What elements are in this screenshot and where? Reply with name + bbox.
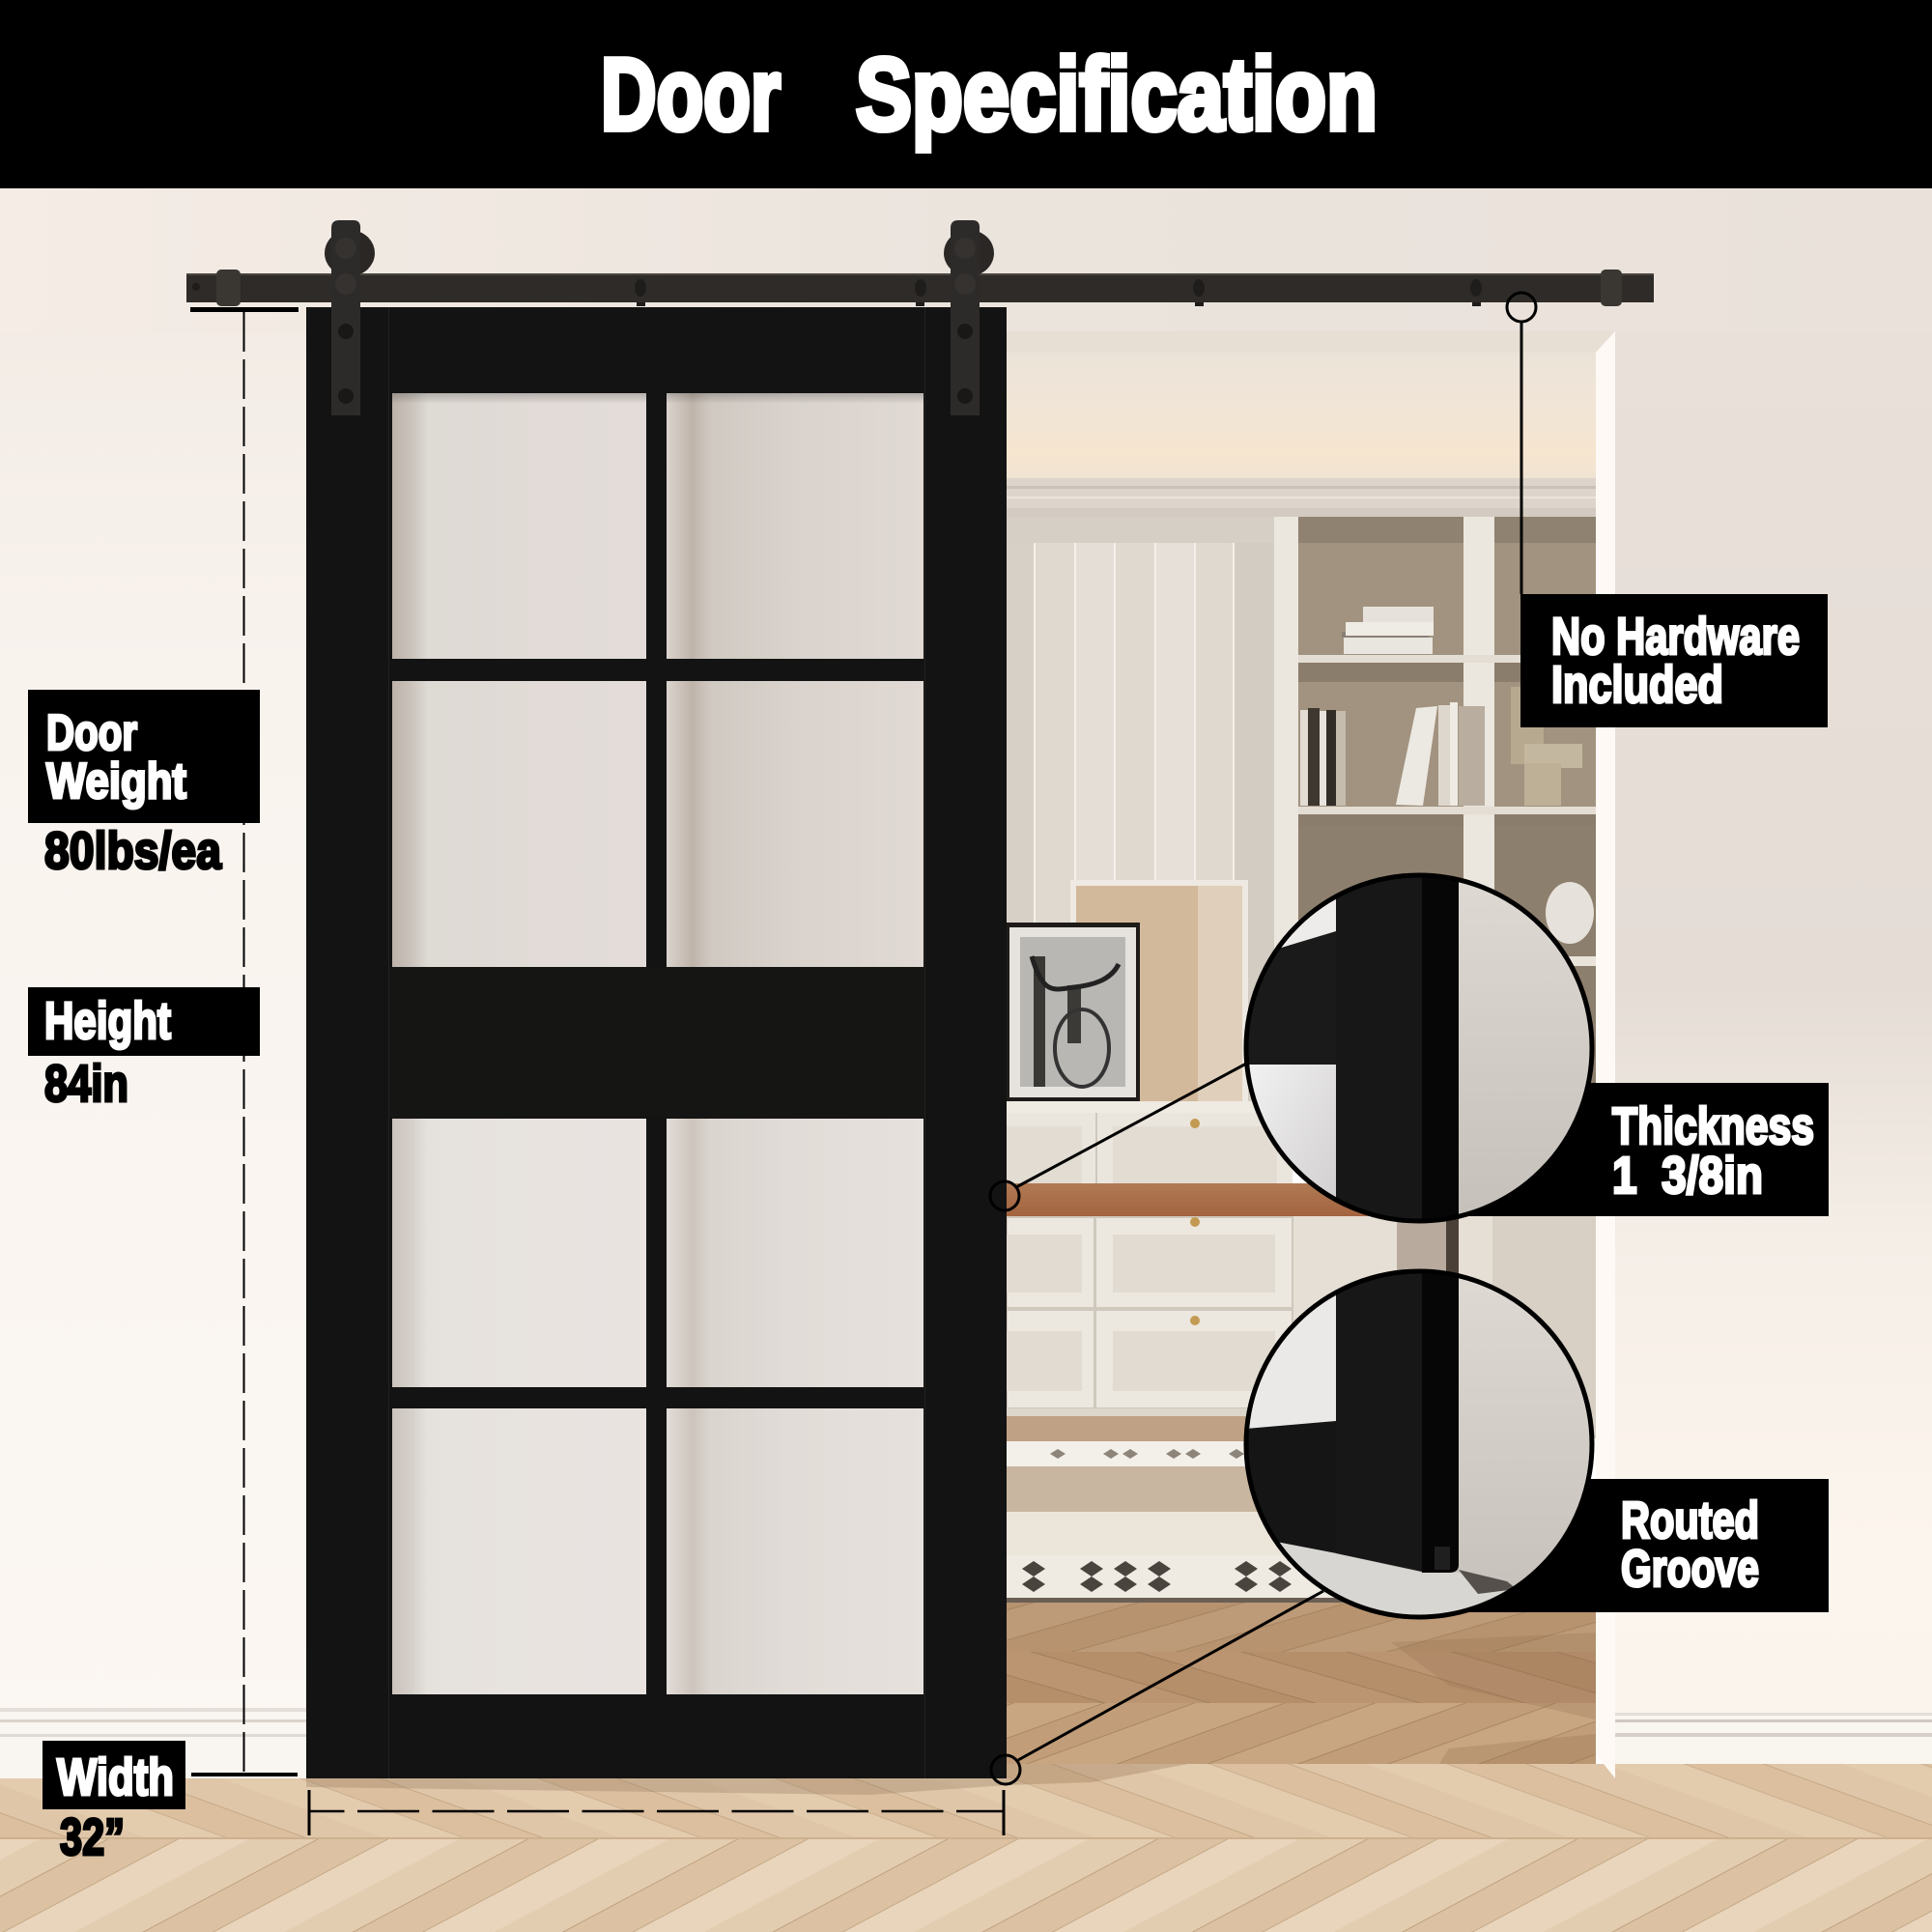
pointer [991,1591,1323,1784]
callout: height [28,987,260,1113]
sideboard [1007,1101,1596,1438]
bookcase [1274,517,1596,1101]
vase [1546,882,1594,944]
callout: door weight: 80lbs/ea [44,822,222,880]
room floor [1007,1602,1932,1785]
callout: width: 32” [60,1808,125,1866]
crown moulding [1007,478,1596,517]
left hanger [331,220,360,415]
callout: thickness [990,1063,1829,1216]
door grain lines [388,307,925,1778]
sliding rail [186,270,1654,306]
sculpture [1511,687,1582,806]
doorway jamb [1596,331,1615,1778]
callout: door weight: Door [46,705,137,761]
mullions [389,393,924,1694]
callout: door weight: Weight [46,753,186,810]
width dimension line [309,1790,1004,1835]
callout: door weight [28,690,260,880]
callout: width [43,1741,185,1866]
background: herringbone floor [0,1778,1932,1932]
callout: thickness: 1 3/8in [1612,1147,1763,1205]
callout: width: Width [57,1748,174,1806]
callout: height: 84in [44,1055,128,1113]
centre lock rail [388,967,924,1118]
framed art [1070,880,1248,1101]
callout: routed groove: Routed [1621,1492,1759,1549]
room ceiling [1007,353,1596,478]
right hanger [951,220,980,415]
glass panes [392,393,923,1694]
hanger wheels [325,230,994,276]
books upright [1300,702,1485,806]
callout: no hardware included: Included [1551,656,1723,714]
framed photo of bicycle [1006,923,1140,1101]
barn door [306,307,1007,1778]
rug and far floor [1007,1416,1393,1603]
room seen through doorway [1006,331,1932,1785]
callout: no hardware included: No Hardware [1551,608,1800,666]
door frame [306,307,1007,1778]
books stacked [1342,607,1434,654]
title: Specification [856,38,1378,152]
callout: thickness: Thickness [1612,1097,1814,1155]
pointer [990,1063,1248,1210]
title: Door [601,38,781,152]
height dimension line [190,307,298,1776]
callout: height: Height [44,992,171,1050]
detail circle: door thickness [1246,874,1594,1224]
callout: routed groove: Groove [1621,1540,1759,1598]
title bar [0,0,1932,188]
pointer [1507,293,1536,594]
right stopper [1601,270,1622,306]
callout: no hardware included [1507,293,1828,727]
callout: routed groove [991,1479,1829,1784]
detail circle: routed groove [1246,1270,1594,1623]
left stopper [216,270,241,306]
background: baseboards [0,1708,1932,1778]
panelled wall [1007,517,1275,1103]
doorway head soffit [1007,331,1615,353]
rail bolts [192,279,1482,306]
title [601,38,1378,152]
